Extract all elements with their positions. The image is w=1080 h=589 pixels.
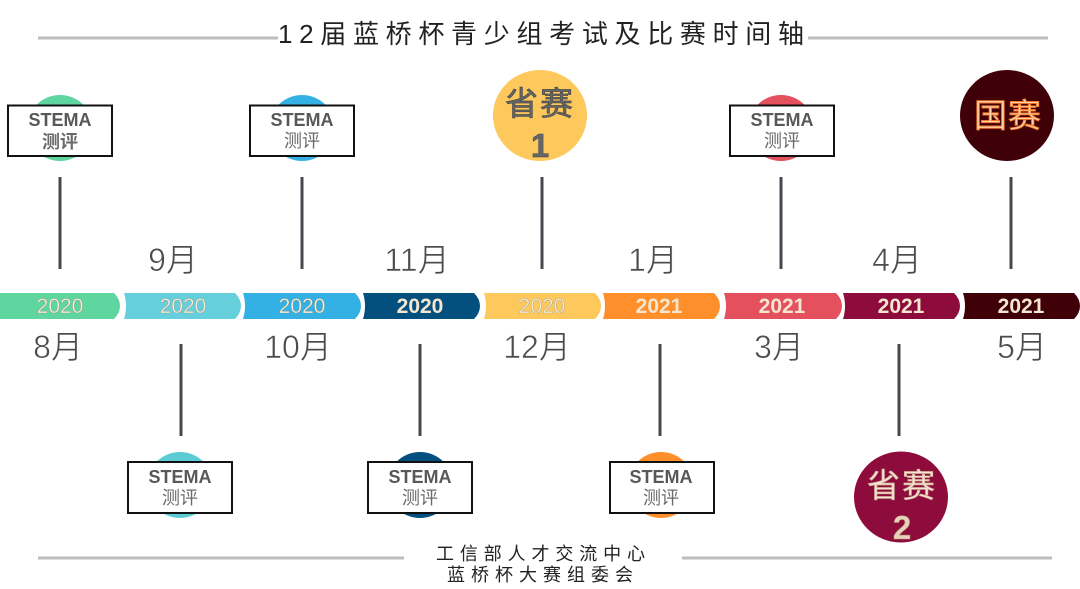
segment: 2021 March xyxy=(724,293,842,319)
title: 12届蓝桥杯青少组考试及比赛时间轴 xyxy=(278,19,804,49)
month labels below: 3月 xyxy=(754,329,804,365)
marker: STEMA January xyxy=(610,452,714,518)
marker: STEMA August: STEMA xyxy=(28,110,92,130)
marker: STEMA November: 测评 xyxy=(402,488,438,508)
marker: STEMA September: 测评 xyxy=(162,488,198,508)
month labels below: 8月 xyxy=(33,329,83,365)
month labels below: 10月 xyxy=(264,329,332,365)
segment: 2021 April: 2021 xyxy=(878,295,925,318)
footer xyxy=(38,544,1052,585)
marker: 省赛1: 1 xyxy=(531,127,549,164)
month labels above: 1月 xyxy=(628,242,678,278)
segment: 2020 September xyxy=(124,293,241,319)
marker: STEMA August xyxy=(8,95,112,161)
marker: 省赛2: 2 xyxy=(893,509,911,546)
marker: STEMA November xyxy=(368,452,472,518)
marker: 省赛2 xyxy=(854,452,948,546)
segment: 2021 January: 2021 xyxy=(636,295,683,318)
connector lines xyxy=(60,177,1011,436)
marker: STEMA September: STEMA xyxy=(148,467,212,487)
segment: 2020 September: 2020 xyxy=(160,295,206,318)
segment: 2021 April xyxy=(843,293,960,319)
marker: 省赛1 xyxy=(493,70,587,164)
marker: STEMA March: 测评 xyxy=(764,131,800,151)
month labels above: 11月 xyxy=(384,242,450,278)
marker: 国赛 xyxy=(960,70,1054,161)
month labels above: 9月 xyxy=(148,242,198,278)
marker: STEMA January: STEMA xyxy=(630,467,693,487)
month labels below: 5月 xyxy=(997,329,1047,365)
segment: 2020 November: 2020 xyxy=(397,295,443,318)
marker: STEMA August: 测评 xyxy=(42,132,78,152)
segment: 2021 January xyxy=(603,293,720,319)
marker: STEMA January: 测评 xyxy=(643,488,679,508)
marker: STEMA October xyxy=(250,95,354,161)
marker: 省赛1: 省赛 xyxy=(505,77,575,125)
segment: 2021 March: 2021 xyxy=(759,295,806,318)
segment: 2020 October xyxy=(243,293,361,319)
month labels above xyxy=(148,242,922,278)
marker: STEMA September xyxy=(128,452,232,518)
segment: 2020 November xyxy=(363,293,480,319)
timeline bar xyxy=(0,293,1080,319)
segment: 2020 August: 2020 xyxy=(37,295,83,318)
footer: 工信部人才交流中心 xyxy=(436,544,645,564)
segment: 2020 December: 2020 xyxy=(519,295,565,318)
month labels below xyxy=(33,329,1047,365)
marker: 省赛2: 省赛 xyxy=(867,459,937,507)
segment: 2020 October: 2020 xyxy=(279,295,325,318)
marker: 国赛: 国赛 xyxy=(974,89,1042,137)
segment: 2020 August xyxy=(0,293,120,319)
marker: STEMA March xyxy=(730,95,834,161)
month labels below: 12月 xyxy=(503,329,571,365)
month labels above: 4月 xyxy=(872,242,922,278)
marker: STEMA November: STEMA xyxy=(388,467,452,487)
segment: 2021 May: 2021 xyxy=(998,295,1045,318)
segment: 2020 December xyxy=(484,293,601,319)
marker: STEMA March: STEMA xyxy=(750,110,814,130)
footer: 蓝桥杯大赛组委会 xyxy=(447,565,633,585)
marker: STEMA October: 测评 xyxy=(284,131,320,151)
segment: 2021 May xyxy=(963,293,1080,319)
marker: STEMA October: STEMA xyxy=(270,110,334,130)
